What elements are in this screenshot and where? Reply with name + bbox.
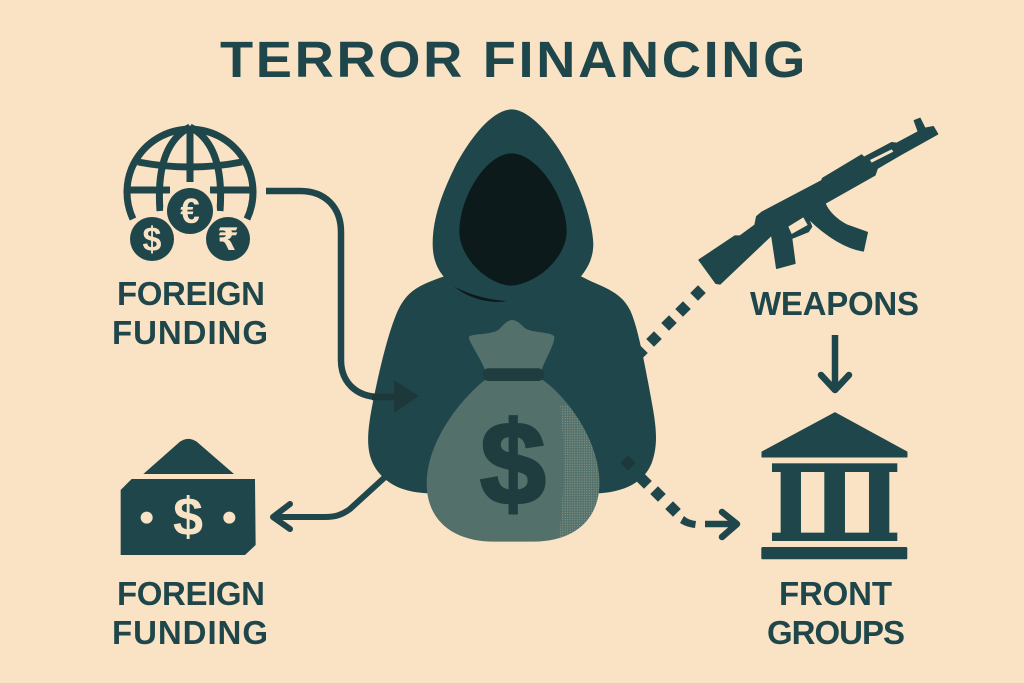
scarf fold: [454, 287, 507, 302]
banknote dollar sign: $: [173, 487, 203, 547]
figure: hooded person: [368, 109, 656, 493]
arrow: weapons to front groups: [821, 335, 849, 390]
label: foreign funding (top): FUNDING: [112, 314, 268, 351]
label: foreign funding (bottom): [112, 575, 268, 651]
icon: bank building: [761, 413, 907, 559]
bag dollar sign: $: [480, 398, 546, 530]
bag body: [427, 380, 599, 542]
label: foreign funding (top): FOREIGN: [117, 275, 265, 312]
hood: [433, 109, 593, 282]
hoodie body: [368, 277, 656, 493]
arrow: line and head over figure: [372, 380, 419, 413]
dotted arrow: figure to front groups: [620, 455, 737, 537]
icon: globe with currency coins: [127, 127, 253, 261]
label: weapons: WEAPONS: [750, 285, 919, 322]
label: front groups: [767, 575, 905, 651]
money bag: [427, 320, 599, 542]
bag tie: [483, 368, 544, 381]
face void: [459, 153, 567, 286]
bag stippled shading: [558, 405, 600, 538]
coin: rupee: ₹: [217, 222, 239, 258]
arrow: foreign funding to figure: [266, 191, 380, 397]
title: TERROR FINANCING: [220, 31, 808, 88]
icon: rifle: [699, 118, 938, 284]
arrow: figure to money: [273, 478, 384, 529]
icon: banknote and envelope flap: [121, 439, 256, 555]
label: front groups: FRONT: [779, 575, 892, 612]
label: foreign funding (bottom): FOREIGN: [117, 575, 265, 612]
bag neck: [469, 320, 554, 370]
label: front groups: GROUPS: [767, 614, 905, 651]
label: foreign funding (top): [112, 275, 268, 351]
label: foreign funding (bottom): FUNDING: [112, 614, 268, 651]
dotted arrow: figure to weapons: [632, 285, 706, 361]
coin: dollar: $: [143, 221, 162, 259]
coin: euro: €: [180, 192, 200, 231]
